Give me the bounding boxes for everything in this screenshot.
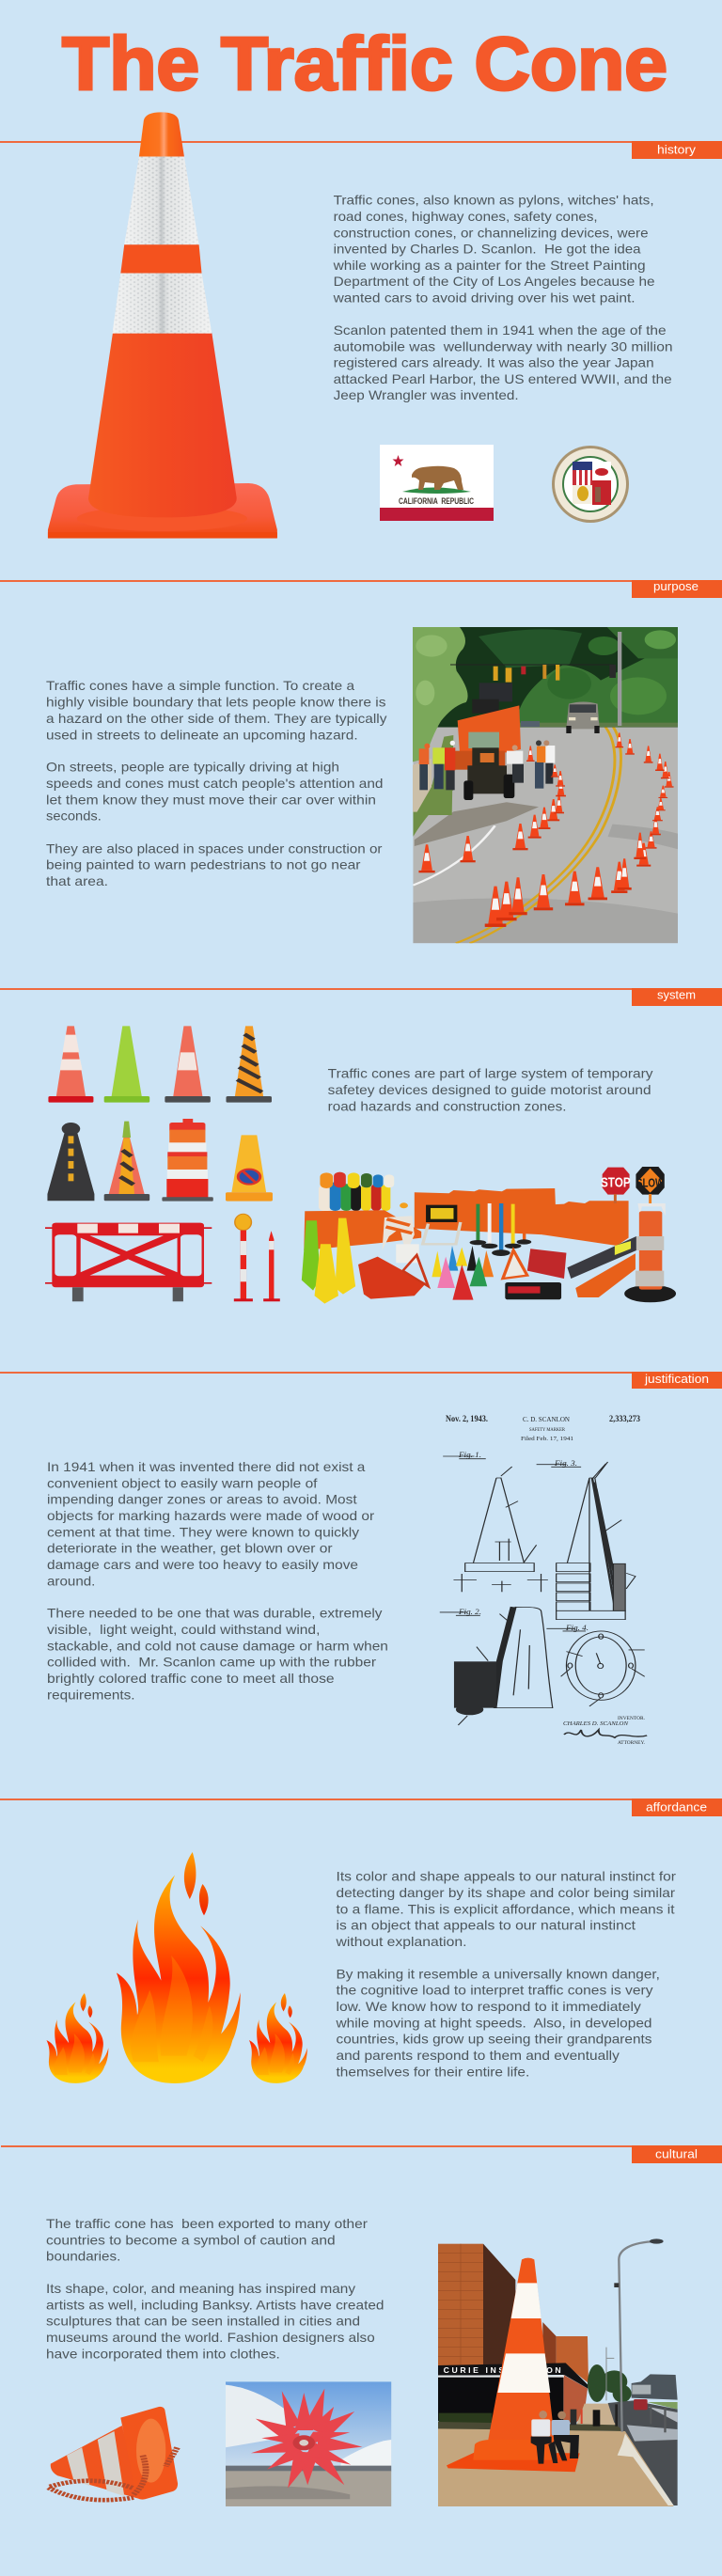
panel: system (0, 988, 722, 1304)
patent captions: 2,333,273 (609, 1414, 640, 1423)
text: system description: road hazards and construction zones. (328, 1098, 566, 1113)
car (566, 701, 600, 729)
photo: giant cone sculpture outside Curie Institute (438, 2238, 678, 2506)
patent captions: SAFETY MARKER (529, 1428, 566, 1433)
text: cultural paragraphs: boundaries. (46, 2249, 120, 2264)
text: history paragraphs: while working as a painter for the Street Painting (332, 258, 646, 273)
text: justification paragraphs: objects for marking hazards were made of wood or (47, 1508, 375, 1523)
image: cone handbag (48, 2407, 178, 2500)
patent captions (446, 1414, 645, 1746)
seated men (531, 2411, 579, 2464)
section tag: history (632, 141, 722, 159)
section tag: purpose (632, 579, 722, 598)
text: history paragraphs: attacked Pearl Harbor, the US entered WWII, and the (334, 371, 672, 386)
skid steer (468, 732, 499, 748)
text: affordance paragraphs: themselves for their entire life. (337, 2064, 529, 2079)
section tag: purpose: purpose (653, 579, 698, 593)
image: patent drawing (440, 1414, 647, 1746)
text: justification paragraphs: impending danger zones or areas to avoid. Most (47, 1492, 357, 1507)
text: purpose paragraphs: speeds and cones must catch people's attention and (46, 776, 384, 791)
text: affordance paragraphs: is an object that appeals to our natural instinct (337, 1918, 636, 1933)
panel: affordance (0, 1798, 722, 2083)
text: purpose paragraphs: Traffic cones have a simple function. To create a (46, 678, 354, 693)
text: purpose paragraphs: seconds. (46, 809, 102, 824)
image: safety devices collage (302, 1167, 676, 1304)
section tag: history: history (657, 142, 697, 156)
text: history paragraphs: registered cars already. It was also the year Japan (334, 355, 654, 370)
panel: justification (0, 1372, 722, 1746)
patent captions: C. D. SCANLON (523, 1416, 570, 1423)
text: affordance paragraphs: Its color and shape appeals to our natural instinct for (337, 1869, 676, 1884)
section tag: affordance: affordance (646, 1800, 707, 1814)
text: purpose paragraphs: let them know they must move their car over within (46, 792, 376, 807)
text: purpose paragraphs: On streets, people are typically driving at high (46, 760, 339, 775)
text: history paragraphs: Department of the City of Los Angeles because he (334, 274, 655, 289)
patent captions: Fig. 4. (565, 1624, 589, 1632)
patent figures (440, 1456, 647, 1737)
panel: purpose (0, 579, 722, 943)
text: affordance paragraphs: to a flame. This is explicit affordance, which means it (337, 1901, 675, 1916)
text: affordance paragraphs: while moving at hight speeds. Also, in developed (335, 2015, 652, 2030)
section tag: cultural: cultural (655, 2147, 698, 2161)
text: justification paragraphs: cement at that time. They were known to quickly (47, 1524, 359, 1539)
text: system description: Traffic cones are part of large system of temporary (328, 1066, 652, 1081)
photo: giant cone sculpture outside Curie Institute: CURIE INSTITUTION (444, 2365, 561, 2375)
text: cultural paragraphs: sculptures that can be seen installed in cities and (46, 2314, 360, 2329)
text: justification paragraphs: convenient object to easily warn people of (47, 1475, 318, 1490)
section tag: cultural (632, 2145, 722, 2163)
icon: large traffic cone (48, 112, 277, 539)
image: safety devices collage: STOP (601, 1174, 631, 1190)
section tag: justification: justification (644, 1372, 709, 1386)
image: safety devices collage: SLOW (636, 1177, 665, 1190)
patent captions: Fig. 3. (554, 1459, 577, 1468)
text: justification paragraphs: stackable, and cold not cause damage or harm when (47, 1638, 388, 1653)
road surface (413, 728, 678, 944)
icon: three flames (46, 1852, 307, 2083)
text: cultural paragraphs (46, 2216, 384, 2361)
text: purpose paragraphs: highly visible boundary that lets people know there is (46, 694, 385, 709)
section tag: justification (632, 1372, 722, 1389)
text: cultural paragraphs: Its shape, color, and meaning has inspired many (46, 2281, 355, 2296)
panel: history (0, 112, 722, 539)
section tag: affordance (632, 1798, 722, 1816)
cones in the road (418, 732, 674, 927)
title: The Traffic Cone (62, 22, 667, 105)
text: history paragraphs: Traffic cones, also known as pylons, witches' hats, (334, 192, 654, 207)
panel: cultural (1, 2145, 722, 2506)
text: history paragraphs: Scanlon patented them in 1941 when the age of the (334, 322, 667, 338)
icon: California flag: CALIFORNIA REPUBLIC (399, 496, 474, 507)
text: cultural paragraphs: artists as well, including Banksy. Artists have created (46, 2297, 384, 2312)
patent captions: Nov. 2, 1943. (446, 1414, 488, 1423)
text: purpose paragraphs: a hazard on the other side of them. They are typically (46, 711, 386, 726)
text: system description: safetey devices designed to guide motorist around (328, 1082, 651, 1097)
patent captions: Filed Feb. 17, 1941 (521, 1437, 573, 1442)
text: justification paragraphs: visible, light weight, could withstand wind, (47, 1622, 320, 1637)
text: affordance paragraphs: By making it resemble a universally known danger, (337, 1966, 660, 1981)
text: justification paragraphs: requirements. (47, 1687, 135, 1702)
text: justification paragraphs: In 1941 when it was invented there did not exist a (47, 1459, 366, 1474)
icon: City of Los Angeles seal (552, 446, 629, 523)
text: history paragraphs (332, 192, 673, 402)
patent captions: Fig. 1. (458, 1451, 481, 1459)
truck (479, 683, 512, 701)
text: cultural paragraphs: have incorporated them into clothes. (46, 2346, 280, 2361)
patent captions: ATTORNEY. (618, 1741, 645, 1746)
photo: cones around road work (413, 627, 678, 943)
text: purpose paragraphs: They are also placed in spaces under construction or (46, 840, 383, 856)
text: justification paragraphs: damage cars and were too heavy to easily move (47, 1557, 358, 1572)
text: justification paragraphs: brightly colored traffic cone to meet all those (47, 1671, 335, 1686)
text: system description (328, 1066, 652, 1113)
text: affordance paragraphs: countries, kids grow up seeing their grandparents (337, 2032, 652, 2047)
text: affordance paragraphs: low. We know how to respond to it immediately (337, 1999, 641, 2014)
patent captions: Fig. 2. (458, 1608, 481, 1616)
text: cultural paragraphs: countries to become a symbol of caution and (46, 2232, 336, 2247)
trees, truck, workers and car (413, 627, 678, 815)
text: justification paragraphs: There needed to be one that was durable, extremely (47, 1606, 382, 1621)
text: cultural paragraphs: The traffic cone has been exported to many other (46, 2216, 368, 2231)
text: justification paragraphs: around. (47, 1573, 95, 1588)
text: purpose paragraphs (46, 678, 386, 888)
text: affordance paragraphs: without explanation. (335, 1934, 466, 1949)
workers (419, 763, 428, 790)
text: affordance paragraphs: the cognitive load to interpret traffic cones is very (337, 1983, 652, 1998)
text: affordance paragraphs: detecting danger by its shape and color being similar (337, 1885, 675, 1900)
text: purpose paragraphs: being painted to warn pedestrians to not go near (46, 857, 361, 872)
icon: California flag (380, 445, 494, 521)
icons: cone varieties grid (45, 1026, 280, 1301)
text: justification paragraphs: deteriorate in the weather, get blown over or (47, 1541, 333, 1556)
text: history paragraphs: Jeep Wrangler was invented. (334, 387, 519, 402)
section tag: system: system (657, 988, 696, 1002)
text: history paragraphs: road cones, highway cones, safety cones, (334, 209, 598, 224)
text: purpose paragraphs: used in streets to delineate an upcoming hazard. (46, 727, 358, 742)
patent captions: CHARLES D. SCANLON (563, 1721, 629, 1727)
text: history paragraphs: wanted cars to avoid driving over his wet paint. (332, 290, 636, 305)
text: justification paragraphs (47, 1459, 388, 1702)
giant cone (447, 2258, 580, 2472)
text: cultural paragraphs: museums around the world. Fashion designers also (46, 2330, 375, 2345)
text: history paragraphs: automobile was wellunderway with nearly 30 million (334, 338, 673, 353)
text: history paragraphs: invented by Charles D. Scanlon. He got the idea (334, 242, 641, 257)
text: affordance paragraphs (335, 1869, 676, 2079)
photo: star sculpture made of cones (226, 2381, 391, 2506)
text: purpose paragraphs: that area. (46, 873, 108, 888)
text: justification paragraphs: collided with. Mr. Scanlon came up with the rubber (47, 1655, 376, 1670)
text: history paragraphs: construction cones, or channelizing devices, were (334, 225, 649, 240)
section tag: system (632, 988, 722, 1006)
text: affordance paragraphs: and parents respond to them and eventually (337, 2048, 620, 2063)
patent captions: INVENTOR. (618, 1717, 645, 1721)
